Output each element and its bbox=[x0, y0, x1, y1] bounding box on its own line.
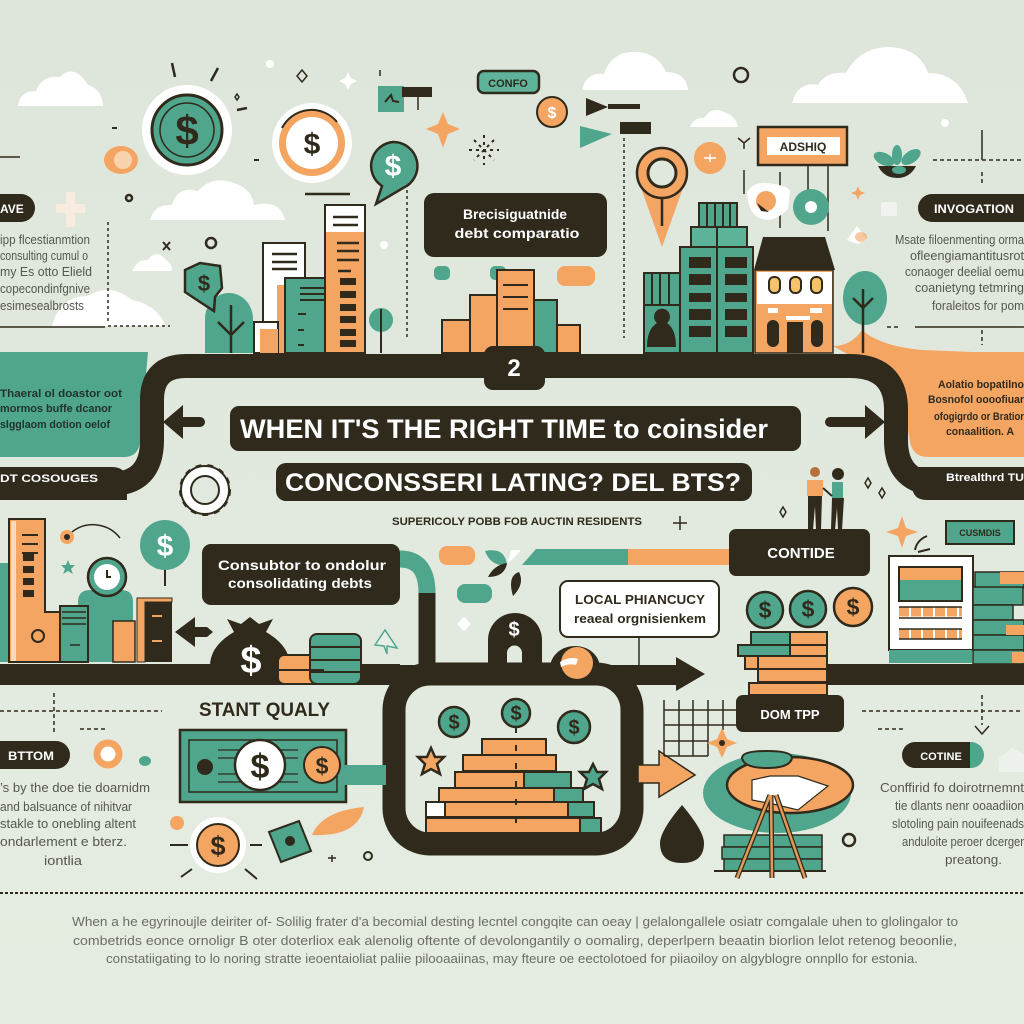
text block: bottom right paragraph: Conffirid fo doirotrnemnt bbox=[880, 781, 1024, 795]
arrow: lower left bbox=[175, 617, 213, 647]
pill: bottom left label bbox=[0, 741, 70, 769]
icon: small coin bbox=[537, 97, 567, 127]
footer text: combetrids eonce ornoligr B oter doterliox eak alenolig oftente of devolongantily o oomalirg, deperlpern beaatin biorlion lelot retenog beoonlie, bbox=[73, 933, 957, 948]
text block: teal panel: slgglaom dotion oelof bbox=[0, 419, 110, 431]
dollar signs on coins: $ bbox=[759, 597, 772, 623]
clouds bbox=[18, 47, 968, 326]
dollars bbox=[448, 703, 580, 739]
arch bbox=[488, 613, 542, 668]
text block: bottom right paragraph: preatong. bbox=[945, 853, 1002, 867]
callout: debt comparison: Brecisiguatnide bbox=[463, 207, 568, 222]
pill: left top label bbox=[0, 194, 35, 222]
callout: consolidating debts: Consubtor to ondolur bbox=[218, 557, 387, 573]
small marks bbox=[328, 855, 336, 862]
orange land bbox=[833, 330, 1024, 384]
icon: gear bbox=[180, 465, 230, 515]
label: right lower pill text: Btrealthrd TU bbox=[946, 472, 1024, 484]
small pills bbox=[434, 266, 595, 286]
icon: orange coin with rays: $ bbox=[210, 831, 226, 861]
divider bbox=[0, 892, 1024, 894]
stars bbox=[418, 748, 444, 774]
road bbox=[40, 366, 1024, 484]
icon: large teal dollar coin: $ bbox=[175, 107, 199, 154]
icon: map pin bbox=[637, 148, 687, 247]
text block: teal panel: Thaeral ol doastor oot bbox=[0, 388, 122, 400]
icon: orange dollar coin bbox=[272, 103, 352, 183]
city: right buildings bbox=[644, 203, 1024, 384]
icon: small orange coin bbox=[104, 146, 138, 174]
text block: left top paragraph: copecondinfgnive bbox=[0, 282, 90, 296]
dot bbox=[170, 816, 184, 830]
pill: bottom left label: BTTOM bbox=[8, 749, 54, 763]
section: top left coins bbox=[104, 85, 432, 204]
text block: left top paragraph: my Es otto Elield bbox=[0, 265, 92, 279]
label: step number bbox=[484, 346, 545, 390]
dollar signs on coins: $ bbox=[847, 594, 860, 620]
tower windows bbox=[689, 257, 747, 337]
text block: bottom left paragraph: and balsuance of nihitvar bbox=[0, 800, 132, 814]
text block: teal panel: mormos buffe dcanor bbox=[0, 403, 113, 415]
title line 1 bbox=[230, 406, 801, 451]
teal curve connector bbox=[400, 559, 427, 593]
section: pyramid inside frame bbox=[418, 699, 606, 833]
callout: debt comparison bbox=[424, 193, 607, 257]
right building bbox=[889, 556, 973, 663]
label: left lower pill text: DT COSOUGES bbox=[0, 473, 98, 485]
city: top left buildings bbox=[185, 205, 393, 353]
icon: arc with orange dot bbox=[60, 525, 120, 544]
bottom road bbox=[0, 592, 1024, 844]
icon: small bills bbox=[269, 821, 311, 862]
text block: right top paragraph: coanietyng tetmring bbox=[915, 281, 1024, 295]
icon: dotted star bbox=[469, 135, 499, 165]
coins row bbox=[747, 588, 872, 628]
pill: left lower bbox=[0, 467, 127, 500]
icon: bubble dollar bbox=[185, 263, 222, 311]
icon: teal square flag bbox=[378, 86, 432, 112]
top road and side connectors bbox=[0, 352, 1024, 500]
text block: left top paragraph: esimesealbrosts bbox=[0, 299, 84, 313]
callout: local philanthropy bbox=[560, 581, 719, 665]
text block: right top paragraph bbox=[895, 233, 1024, 313]
icon: round white and teal discs bbox=[747, 183, 829, 225]
title line 2: CONCONSSERI LATING? DEL BTS? bbox=[285, 469, 741, 497]
footer text: constatiigating to lo noring stratte ieoentaioliat paliie pilooaaiinas, may fteure oe eectolotoed for piiaoiloy on algyblogre onnpllo for estonia. bbox=[106, 951, 918, 966]
coins on pyramid bbox=[439, 699, 590, 743]
bar connector bbox=[522, 549, 730, 565]
text block: right top paragraph: ofleengiamantitusrot bbox=[910, 249, 1024, 263]
white dots bbox=[266, 60, 949, 249]
icon: orange leaf bbox=[312, 807, 364, 835]
text block: left top paragraph bbox=[0, 233, 92, 313]
icon: orange star bbox=[426, 112, 460, 148]
continue box bbox=[729, 529, 870, 576]
box: dom tpp bbox=[736, 695, 844, 732]
pill: innovation: INVOGATION bbox=[934, 202, 1014, 216]
callout: consolidating debts: consolidating debts bbox=[228, 575, 372, 591]
icon: bubble dollar: $ bbox=[198, 271, 210, 296]
text block: orange panel bbox=[928, 379, 1024, 438]
callout: local philanthropy: LOCAL PHIANCUCY bbox=[575, 593, 706, 607]
label: confo pill bbox=[478, 71, 539, 93]
dollars: $ bbox=[510, 703, 522, 725]
icon: orange coin with rays bbox=[170, 817, 262, 879]
pill: right lower bbox=[912, 467, 1024, 500]
icon: leaves in bowl bbox=[871, 145, 923, 178]
pill: innovation bbox=[918, 194, 1024, 222]
icon: orange coin bbox=[304, 747, 340, 783]
label: stant qualy: STANT QUALY bbox=[199, 700, 330, 721]
connector bar bbox=[340, 765, 386, 785]
small pills bbox=[439, 546, 492, 603]
pill: left top label: AVE bbox=[0, 202, 24, 216]
icon: small star bbox=[61, 560, 75, 574]
footer text bbox=[72, 914, 958, 966]
label: confo pill: CONFO bbox=[488, 78, 528, 90]
icon: teal coin with pin: $ bbox=[157, 530, 174, 563]
text block: teal panel bbox=[0, 388, 122, 431]
tree bbox=[843, 271, 887, 353]
text block: left top paragraph: consulting cumul o bbox=[0, 249, 88, 263]
icon: pale house bbox=[999, 748, 1024, 772]
green stacks bbox=[973, 572, 1024, 664]
icon: teal coin with pin bbox=[140, 520, 190, 586]
title line 1: WHEN IT'S THE RIGHT TIME to coinsider bbox=[240, 414, 768, 444]
icon: orange coin: $ bbox=[316, 753, 329, 779]
city: centre buildings bbox=[442, 270, 580, 353]
text block: left top paragraph: ipp flcestianmtion bbox=[0, 233, 90, 247]
small decor bbox=[847, 186, 897, 244]
continue box: CONTIDE bbox=[767, 545, 835, 562]
icon: speech bubble dollar: $ bbox=[385, 150, 402, 183]
icon: banknote: $ bbox=[251, 748, 270, 786]
icon: ball bbox=[560, 647, 593, 679]
arrow: right bbox=[825, 405, 885, 439]
panel: left teal bbox=[0, 352, 148, 457]
dollars: $ bbox=[448, 712, 460, 734]
house bbox=[754, 237, 835, 353]
stack of bars bbox=[738, 632, 827, 695]
subtitle: SUPERICOLY POBB FOB AUCTIN RESIDENTS bbox=[392, 516, 642, 528]
dashed guides bbox=[862, 695, 1022, 729]
callout: consolidating debts bbox=[202, 544, 400, 605]
label: small teal sign bbox=[946, 521, 1014, 544]
icon: orange coin bbox=[694, 142, 726, 174]
money bag: $ bbox=[240, 640, 262, 682]
panel: right orange bbox=[895, 352, 1024, 457]
icon: triangle sparkle bbox=[375, 630, 397, 654]
title line 2 bbox=[276, 463, 752, 501]
stacks orange highlight bbox=[1000, 572, 1024, 663]
icon: leaf dark bbox=[660, 805, 704, 863]
icon: small coin: $ bbox=[548, 105, 557, 122]
dashed lines bbox=[0, 693, 162, 733]
ring near stack bbox=[843, 834, 855, 846]
dollar signs on coins: $ bbox=[802, 596, 815, 622]
text block: orange panel: conaalition. A bbox=[946, 426, 1014, 438]
text block: bottom right paragraph bbox=[880, 781, 1024, 867]
icon: orange star small bbox=[886, 516, 918, 548]
text block: bottom left paragraph: ’s by the doe tie doarnidm bbox=[0, 781, 150, 795]
callout: debt comparison: debt comparatio bbox=[454, 226, 580, 241]
icon: orange dollar coin: $ bbox=[304, 128, 321, 161]
text block: bottom left paragraph: ondarlement e bterz. bbox=[0, 835, 127, 849]
tree bbox=[205, 293, 253, 353]
pyramid bars bbox=[426, 727, 601, 833]
figures: couple bbox=[807, 467, 844, 530]
telescope on stacks bbox=[703, 751, 853, 878]
dollar signs on coins bbox=[759, 594, 860, 623]
ring bbox=[364, 852, 372, 860]
icon: orange sparkle bbox=[707, 728, 737, 758]
icon: flags bbox=[580, 98, 651, 148]
box: dom tpp: DOM TPP bbox=[760, 707, 820, 722]
icon: clock bbox=[88, 558, 126, 596]
coin stacks bbox=[278, 634, 361, 684]
frame bbox=[394, 674, 632, 844]
grid chart bbox=[664, 700, 736, 756]
icon: pale cross bbox=[56, 192, 85, 227]
text block: bottom left paragraph bbox=[0, 781, 150, 868]
rays and sparkles bbox=[112, 63, 748, 250]
label: step number: 2 bbox=[507, 355, 521, 382]
icon: white dollar on arch: $ bbox=[508, 619, 520, 641]
label: small teal sign: CUSMDIS bbox=[959, 528, 1001, 538]
money bag bbox=[210, 617, 290, 682]
arrow head bbox=[676, 657, 705, 691]
pill: bottom right label bbox=[902, 742, 984, 768]
callout: local philanthropy: reaeal orgnisienkem bbox=[574, 612, 706, 626]
footer text: When a he egyrinoujle deiriter of- Solilig frater d'a becomial desting lecntel congqite can oeay | gelalongallele osiatr comgalale uhen to glolingalor to bbox=[72, 914, 958, 929]
sign: adshiq bbox=[758, 127, 847, 165]
icon: speech bubble dollar bbox=[371, 142, 417, 204]
arrow: left bbox=[163, 405, 205, 439]
icon: ring bbox=[97, 743, 151, 766]
text block: bottom left paragraph: stakle to onebling altent bbox=[0, 817, 137, 831]
arrow: down bbox=[975, 726, 989, 734]
text block: bottom left paragraph: iontlia bbox=[44, 854, 82, 868]
sign: adshiq: ADSHIQ bbox=[780, 140, 826, 154]
arrow: orange bbox=[638, 751, 695, 797]
icon: white sparkle bbox=[457, 617, 471, 631]
section: lower left buildings bbox=[0, 519, 172, 662]
icon: large teal dollar coin bbox=[142, 85, 232, 175]
dollars: $ bbox=[568, 717, 580, 739]
pill: bottom right label: COTINE bbox=[920, 751, 962, 763]
icon: banknote bbox=[180, 730, 346, 802]
icon: leaves bbox=[485, 550, 521, 596]
